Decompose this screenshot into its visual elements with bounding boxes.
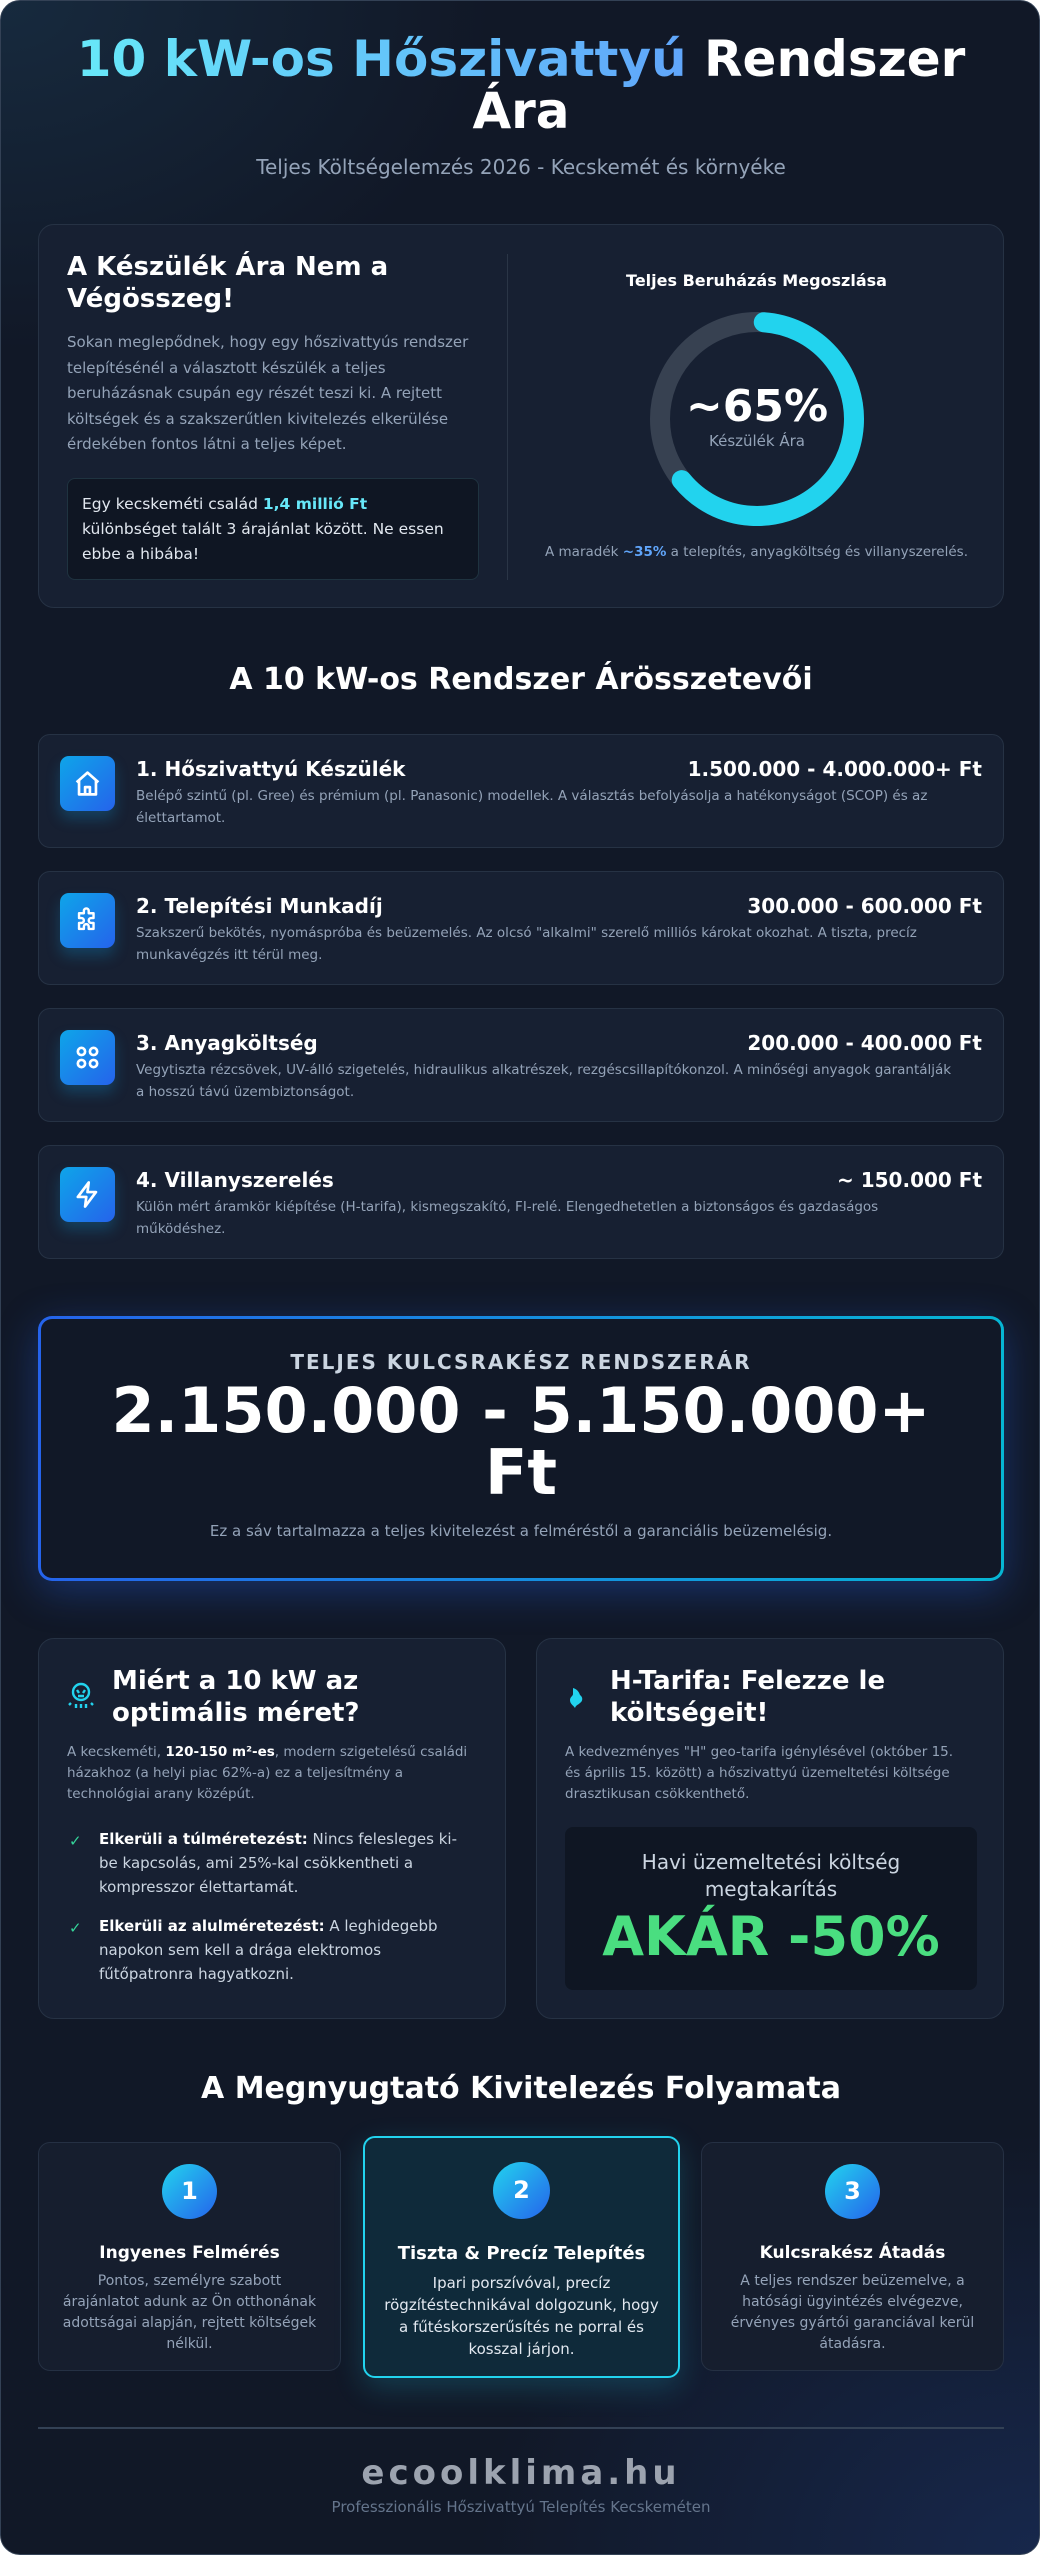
- row: electrical: 4. Villanyszerelés: [136, 1168, 334, 1192]
- divider: [507, 254, 508, 580]
- intro heading: A Készülék Ára Nem a Végösszeg!: [67, 252, 388, 314]
- savings figure: AKÁR -50%: [602, 1905, 940, 1968]
- row: labour: 2. Telepítési Munkadíj: [136, 894, 383, 918]
- row: device: [38, 734, 1004, 848]
- savings box: Havi üzemeltetési költség: [642, 1850, 900, 1874]
- row: labour: 300.000 - 600.000 Ft: [747, 894, 982, 918]
- footer tagline: Professzionális Hőszivattyú Telepítés Kecskeméten: [332, 2498, 710, 2516]
- icon: leaf: [570, 1688, 582, 1708]
- step 1: 1: [181, 2177, 198, 2205]
- intro paragraph: Sokan meglepődnek, hogy egy hőszivattyús rendszer telepítésénél a választott készülék a teljes beruházásnak csupán egy részét teszi ki. A rejtett költségek és a szakszerűtlen kivitelezés elkerülése érdekében fontos látni a teljes képet.: [67, 333, 468, 453]
- section heading: components: A 10 kW-os Rendszer Árösszetevői: [229, 662, 813, 697]
- total label: TELJES KULCSRAKÉSZ RENDSZERÁR: [290, 1350, 752, 1374]
- total price: Ft: [485, 1436, 557, 1509]
- row: materials: 3. Anyagköltség: [136, 1031, 318, 1055]
- icon: lightning: [60, 1167, 115, 1222]
- row: device: 1. Hőszivattyú Készülék: [136, 757, 405, 781]
- row: materials: 200.000 - 400.000 Ft: [747, 1031, 982, 1055]
- step 3: 3: [844, 2177, 861, 2205]
- icon: gauge: [68, 1682, 94, 1708]
- icon: grid: [60, 1030, 115, 1085]
- step 1: Ingyenes Felmérés: [99, 2243, 280, 2263]
- paragraph: A kedvezményes "H" geo-tarifa igénylésével (október 15. és április 15. között) a hőszivattyú üzemeltetési költsége drasztikusan csökkenthető.: [565, 1744, 953, 1802]
- check item 1: Elkerüli a túlméretezést: Nincs felesleges ki-be kapcsolás, ami 25%-kal csökkentheti a kompresszor élettartamát.: [99, 1830, 457, 1896]
- total price: [111, 1374, 931, 1509]
- row: device: 1.500.000 - 4.000.000+ Ft: [688, 757, 982, 781]
- subtitle: Teljes Költségelemzés 2026 - Kecskemét és környéke: [256, 155, 786, 179]
- step 2 highlighted: [363, 2136, 680, 2378]
- step 3: Kulcsrakész Átadás: [760, 2243, 945, 2263]
- step 1: Pontos, személyre szabott árajánlatot adunk az Ön otthonának adottságai alapján, rejtett költségek nélkül.: [63, 2273, 316, 2352]
- total price box: [38, 1316, 1004, 1581]
- check item 2: ✓: [69, 1919, 82, 1937]
- savings box: [565, 1827, 977, 1990]
- row: materials: Vegytiszta rézcsövek, UV-álló szigetelés, hidraulikus alkatrészek, rezgéscsillapítókonzol. A minőségi anyagok garantálják a hosszú távú üzembiztonságot.: [136, 1062, 951, 1100]
- title: [77, 30, 966, 140]
- donut chart: ~65%: [686, 381, 828, 432]
- row: device: Belépő szintű (pl. Gree) és prémium (pl. Panasonic) modellek. A választás befolyásolja a hatékonyságot (SCOP) és az élettartamot.: [136, 788, 927, 826]
- footer brand: ecoolklima.hu: [361, 2453, 681, 2493]
- check item 1: ✓: [69, 1832, 82, 1850]
- row: electrical: ~ 150.000 Ft: [837, 1168, 982, 1192]
- donut chart: Készülék Ára: [709, 431, 805, 450]
- callout: Egy kecskeméti család 1,4 millió Ft különbséget talált 3 árajánlat között. Ne essen ebbe a hibába!: [82, 495, 444, 563]
- title: Ára: [472, 82, 570, 140]
- callout: [67, 478, 479, 580]
- step 2 highlighted: Ipari porszívóval, precíz rögzítéstechnikával dolgozunk, hogy a fűtéskorszerűsítés ne porral és kosszal járjon.: [384, 2274, 659, 2358]
- step 3: [701, 2142, 1004, 2371]
- row: electrical: [38, 1145, 1004, 1259]
- step 3: A teljes rendszer beüzemelve, a hatósági ügyintézés elvégezve, érvényes gyártói garanciával kerül átadásra.: [731, 2273, 974, 2352]
- row: electrical: Külön mért áramkör kiépítése (H-tarifa), kismegszakító, FI-relé. Elengedhetetlen a biztonságos és gazdaságos működéshez.: [136, 1199, 878, 1237]
- row: labour: [38, 871, 1004, 985]
- paragraph: A kecskeméti, 120-150 m²-es, modern szigetelésű családi házakhoz (a helyi piac 62%-a) ez a teljesítmény a technológiai arany középút.: [67, 1744, 467, 1802]
- icon: puzzle: [60, 893, 115, 948]
- heading: H-Tarifa: Felezze le költségeit!: [610, 1666, 885, 1728]
- heading: Miért a 10 kW az optimális méret?: [112, 1666, 360, 1728]
- row: labour: Szakszerű bekötés, nyomáspróba és beüzemelés. Az olcsó "alkalmi" szerelő milliós károkat okozhat. A tiszta, precíz munkavégzés itt térül meg.: [136, 925, 917, 963]
- total price: 2.150.000 - 5.150.000+: [111, 1374, 931, 1447]
- step 2 highlighted: 2: [513, 2176, 530, 2204]
- chart caption: A maradék ~35% a telepítés, anyagköltség és villanyszerelés.: [545, 544, 968, 560]
- icon: house: [60, 756, 115, 811]
- section heading: process: A Megnyugtató Kivitelezés Folyamata: [201, 2071, 841, 2106]
- step 2 highlighted: Tiszta & Precíz Telepítés: [398, 2243, 645, 2264]
- panel: H-tariff: [536, 1638, 1004, 2019]
- panel: intro: [38, 224, 1004, 608]
- check item 2: Elkerüli az alulméretezést: A leghidegebb napokon sem kell a drága elektromos fűtőpatronra hagyatkozni.: [99, 1917, 438, 1983]
- panel: why 10 kW: [38, 1638, 506, 2019]
- savings box: megtakarítás: [705, 1877, 837, 1901]
- chart title: Teljes Beruházás Megoszlása: [626, 271, 887, 290]
- step 1: [38, 2142, 341, 2371]
- row: materials: [38, 1008, 1004, 1122]
- donut chart: [650, 312, 864, 526]
- total note: Ez a sáv tartalmazza a teljes kivitelezést a felméréstől a garanciális beüzemelésig.: [210, 1522, 832, 1540]
- title: 10 kW-os Hőszivattyú Rendszer: [77, 30, 965, 88]
